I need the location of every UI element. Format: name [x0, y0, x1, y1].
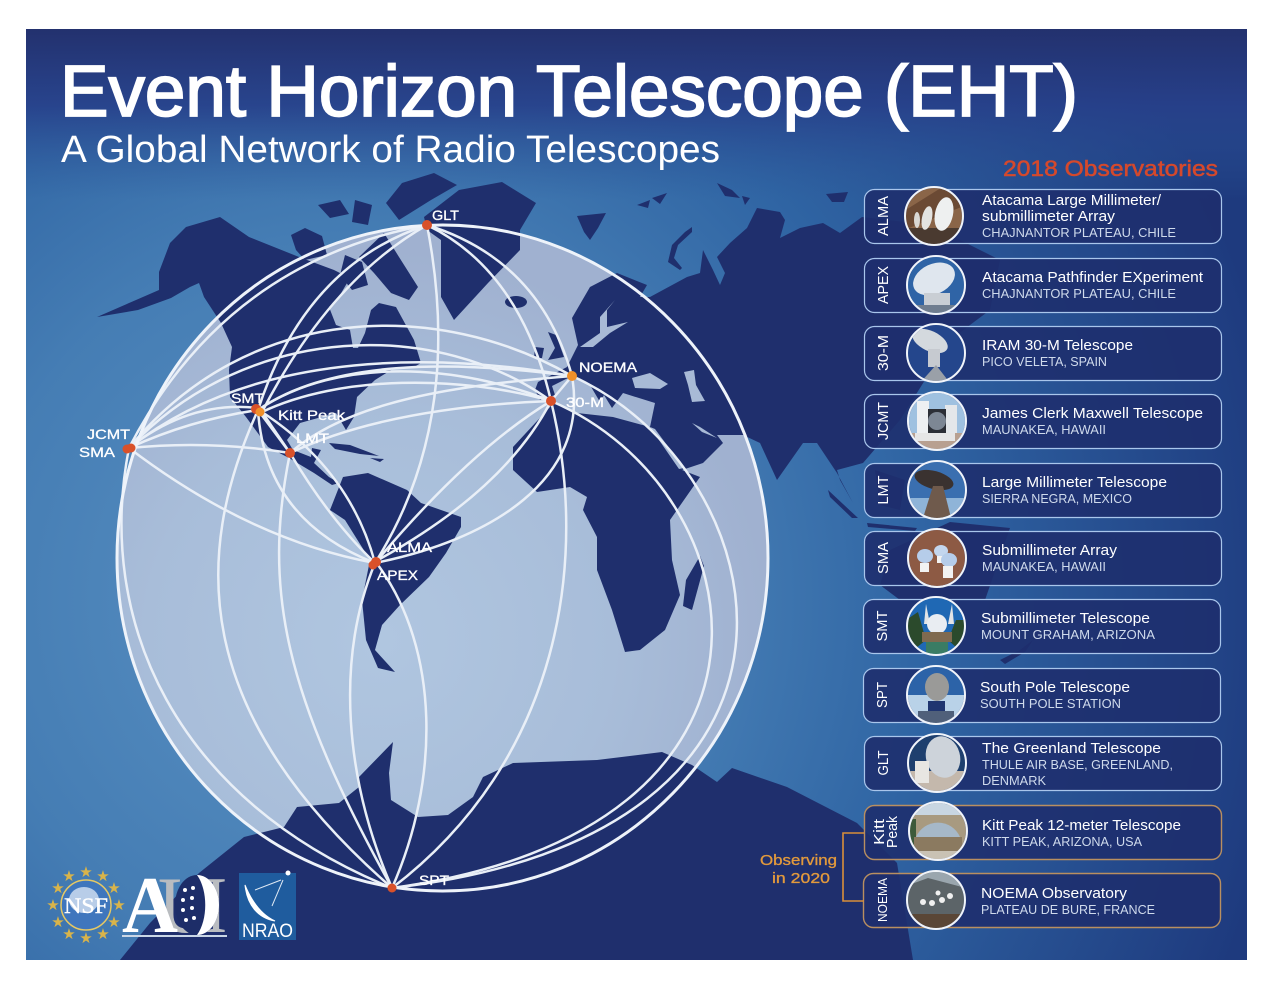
- panel: Kitt Peak: Peak: [885, 815, 901, 848]
- photo: SMA: [907, 528, 967, 588]
- panel: ALMA: submillimeter Array: [982, 209, 1116, 225]
- panel: LMT: LMT: [876, 475, 892, 504]
- panel: LMT: [864, 460, 1222, 520]
- panel: ALMA: Atacama Large Millimeter/: [982, 193, 1162, 209]
- panel: NOEMA: PLATEAU DE BURE, FRANCE: [981, 902, 1155, 917]
- logo: AUI: [122, 862, 227, 950]
- panel: SPT: SPT: [875, 682, 891, 708]
- photo: APEX: [906, 255, 966, 315]
- logo: NSF: [46, 864, 126, 947]
- logo: NSF: ★: [96, 926, 110, 943]
- panel: SMA: SMA: [876, 542, 892, 574]
- panel: Kitt Peak: [864, 801, 1222, 861]
- panel: Kitt Peak: KITT PEAK, ARIZONA, USA: [982, 834, 1142, 849]
- panel: JCMT: MAUNAKEA, HAWAII: [982, 422, 1106, 437]
- map labels: NOEMA: [579, 359, 638, 375]
- logo: NSF: ★: [112, 897, 126, 914]
- panel: 30-M: PICO VELETA, SPAIN: [982, 354, 1107, 369]
- panel: GLT: The Greenland Telescope: [982, 741, 1161, 757]
- panel: 30-M: 30-M: [876, 335, 892, 371]
- panel: NOEMA: NOEMA Observatory: [981, 886, 1128, 902]
- land: Madagascar: [683, 556, 704, 610]
- world map: land outside globe and globe disc: [97, 173, 1033, 960]
- photo: IRAM 30-M: [906, 323, 966, 383]
- telescope markers on map: [122, 220, 577, 892]
- map labels: Kitt Peak: [278, 407, 346, 423]
- land: Iceland: [505, 296, 527, 308]
- panel: Kitt Peak: Kitt: [872, 819, 888, 845]
- globe rim: [117, 225, 768, 891]
- panel: SPT: [864, 665, 1220, 725]
- land: Canadian Arctic islands: [291, 173, 457, 300]
- panel: APEX: [864, 255, 1222, 315]
- panel: SMA: [864, 528, 1222, 588]
- logo: NRAO: NRAO: [242, 921, 293, 942]
- logo: NSF: ★: [96, 868, 110, 885]
- logo: NSF: ★: [79, 864, 93, 881]
- land: Greenland: [424, 182, 536, 320]
- panel: 30-M: IRAM 30-M Telescope: [982, 338, 1133, 354]
- panel: GLT: GLT: [876, 750, 892, 776]
- land: Indonesia and Oceania: [828, 490, 1022, 664]
- map labels: 30-M: [566, 394, 604, 410]
- panel: JCMT: JCMT: [876, 402, 892, 440]
- photo: SMT: [906, 596, 966, 656]
- panel: ALMA: ALMA: [876, 196, 892, 236]
- network arcs between telescopes: [121, 225, 737, 888]
- logo: NSF: ★: [62, 868, 76, 885]
- map labels: [79, 207, 638, 888]
- panel: NOEMA: NOEMA: [875, 878, 890, 922]
- photo: GLT: [907, 732, 967, 793]
- photo: Kitt Peak: [908, 801, 968, 861]
- map labels: GLT: [432, 207, 459, 223]
- photo: ALMA: [904, 186, 964, 246]
- logo: AUI: I: [205, 862, 227, 950]
- logo: NSF: ★: [107, 914, 121, 931]
- map labels: JCMT: [87, 426, 131, 442]
- map labels: LMT: [296, 430, 330, 446]
- legend heading: 2018 Observatories: 2018 Observatories: [1003, 156, 1218, 181]
- land: South America: [330, 473, 461, 672]
- land: Antarctica: [120, 742, 913, 960]
- panel: 30-M: [864, 323, 1222, 383]
- map labels: ALMA: [387, 539, 433, 555]
- map labels: APEX: [377, 567, 419, 583]
- inland seas: [580, 300, 717, 469]
- subtitle: A Global Network of Radio Telescopes: [61, 129, 720, 171]
- photo: LMT: [907, 460, 967, 520]
- photo: JCMT: [907, 391, 967, 451]
- panel: APEX: APEX: [876, 266, 892, 304]
- panel: APEX: Atacama Pathfinder EXperiment: [982, 270, 1203, 286]
- map labels: SMT: [231, 390, 264, 406]
- panel: APEX: CHAJNANTOR PLATEAU, CHILE: [982, 286, 1176, 301]
- land: Arctic Russia islands: [577, 183, 848, 270]
- panel: Kitt Peak: Kitt Peak 12-meter Telescope: [982, 818, 1181, 834]
- logo: NSF: ★: [107, 880, 121, 897]
- logo: NSF: ★: [62, 926, 76, 943]
- photo: SPT: [906, 665, 966, 725]
- panel: LMT: SIERRA NEGRA, MEXICO: [982, 491, 1132, 506]
- panel: GLT: THULE AIR BASE, GREENLAND,: [982, 757, 1173, 772]
- callout: Observing in 2020: [760, 852, 837, 887]
- callout: Observing in 2020: Observing: [760, 852, 837, 869]
- land: Africa: [513, 403, 700, 652]
- land: North America: [97, 217, 421, 485]
- panel: SMT: [864, 596, 1220, 656]
- logo: NSF: ★: [51, 914, 65, 931]
- title: Event Horizon Telescope (EHT): [60, 52, 1078, 132]
- logo: AUI: A: [122, 862, 178, 950]
- panel: SPT: SOUTH POLE STATION: [980, 696, 1121, 711]
- callout: Observing in 2020: in 2020: [772, 870, 830, 887]
- panel: JCMT: James Clerk Maxwell Telescope: [982, 406, 1203, 422]
- panel: NOEMA: [864, 870, 1220, 930]
- photo: NOEMA: [906, 870, 966, 930]
- panel: JCMT: [864, 391, 1222, 451]
- panel: ALMA: CHAJNANTOR PLATEAU, CHILE: [982, 225, 1176, 240]
- logo: NSF: ★: [51, 880, 65, 897]
- panel: GLT: [864, 732, 1222, 793]
- land: Cuba and Caribbean: [329, 443, 384, 462]
- map labels: SMA: [79, 444, 116, 460]
- panel: SMT: MOUNT GRAHAM, ARIZONA: [981, 627, 1155, 642]
- panel: SMA: MAUNAKEA, HAWAII: [982, 559, 1106, 574]
- globe disc: [117, 225, 768, 891]
- panel: GLT: DENMARK: [982, 773, 1046, 788]
- map labels: SPT: [419, 872, 449, 888]
- panel: LMT: Large Millimeter Telescope: [982, 475, 1167, 491]
- logo: NSF: NSF: [64, 893, 108, 918]
- panel: SMA: Submillimeter Array: [982, 543, 1118, 559]
- panel: ALMA: [864, 186, 1222, 246]
- panel: SPT: South Pole Telescope: [980, 680, 1130, 696]
- logo: NSF: ★: [79, 930, 93, 947]
- logo: AUI: U: [158, 862, 214, 950]
- land: Eurasia: [535, 208, 1000, 503]
- panel: SMT: Submillimeter Telescope: [981, 611, 1150, 627]
- land: Britain and Ireland: [534, 332, 564, 360]
- panel: SMT: SMT: [875, 610, 891, 642]
- bracket: observing in 2020: [843, 833, 864, 901]
- logo: NSF: ★: [46, 897, 60, 914]
- logo: NRAO: [239, 870, 296, 942]
